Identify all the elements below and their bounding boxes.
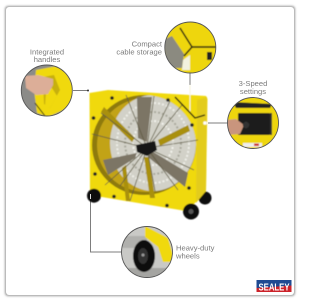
connector lines xyxy=(73,73,228,252)
callout: heavy-duty wheels xyxy=(121,226,215,278)
blades xyxy=(103,97,188,187)
photo: handle xyxy=(22,66,72,116)
label: 3-speed settings: settings xyxy=(240,87,266,96)
housing bolts xyxy=(92,96,194,207)
front left wheel xyxy=(87,189,101,203)
front right wheel xyxy=(183,204,199,220)
wheel connector end xyxy=(90,194,92,199)
white cable connector line xyxy=(189,85,191,111)
housing side panel xyxy=(196,97,207,203)
gold struts xyxy=(101,107,190,201)
label: heavy-duty wheels: wheels xyxy=(175,251,200,260)
label: 3-speed settings: 3-Speed xyxy=(239,79,267,88)
rear wheel xyxy=(198,192,212,204)
photo: cable storage xyxy=(165,22,216,72)
guard wires xyxy=(92,95,198,201)
label: compact cable storage: Compact xyxy=(132,40,162,49)
fan unit xyxy=(87,85,212,220)
hub xyxy=(136,141,157,156)
photo: wheel xyxy=(122,227,172,277)
fan guard and blades xyxy=(92,95,198,201)
label: integrated handles: Integrated xyxy=(30,48,64,56)
logo: Sealey xyxy=(256,280,292,294)
photo: speed control xyxy=(226,97,279,149)
label: compact cable storage: cable storage xyxy=(116,47,162,56)
logo: Sealey: SEALEY xyxy=(258,282,290,294)
white socket xyxy=(203,121,207,125)
callout: compact cable storage xyxy=(116,21,218,75)
yellow fan housing xyxy=(90,90,208,211)
black cable xyxy=(175,97,205,118)
label: heavy-duty wheels: Heavy-duty xyxy=(176,244,214,253)
label: integrated handles: handles xyxy=(34,55,60,64)
callout: integrated handles xyxy=(20,48,74,118)
callout: 3-speed settings xyxy=(226,79,279,149)
